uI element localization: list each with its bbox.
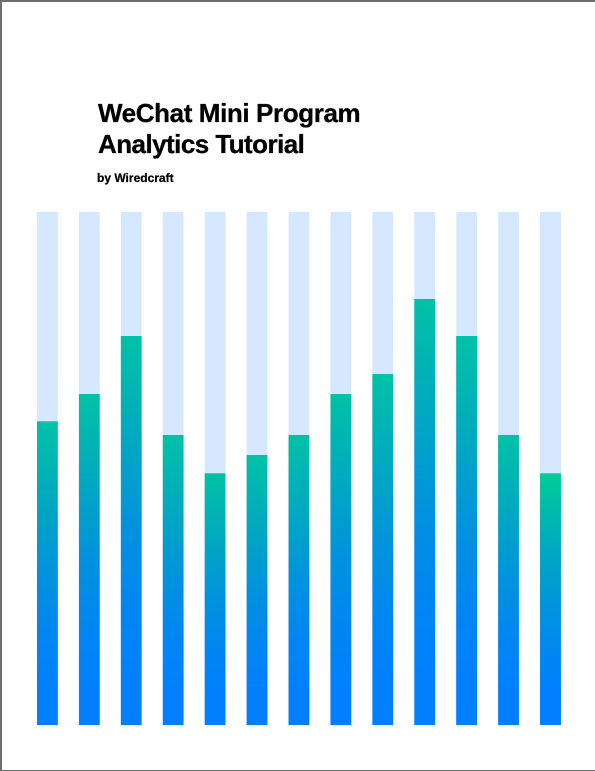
title: Analytics Tutorial xyxy=(98,129,304,159)
bar 11 xyxy=(456,212,477,725)
bar 6 xyxy=(247,212,267,725)
bar 5 xyxy=(205,212,225,725)
bar 10 xyxy=(414,212,435,725)
title: WeChat Mini Program xyxy=(98,98,360,128)
title xyxy=(98,98,360,159)
bar 9 xyxy=(372,212,393,725)
bar 1 xyxy=(37,212,58,725)
bar 8 xyxy=(330,212,351,725)
bar 7 xyxy=(289,212,309,725)
bar 12 xyxy=(498,212,519,725)
bar 13 xyxy=(540,212,561,725)
bar 3 xyxy=(121,212,142,725)
byline: by Wiredcraft xyxy=(97,171,174,185)
bar 4 xyxy=(163,212,184,725)
bar 2 xyxy=(79,212,100,725)
